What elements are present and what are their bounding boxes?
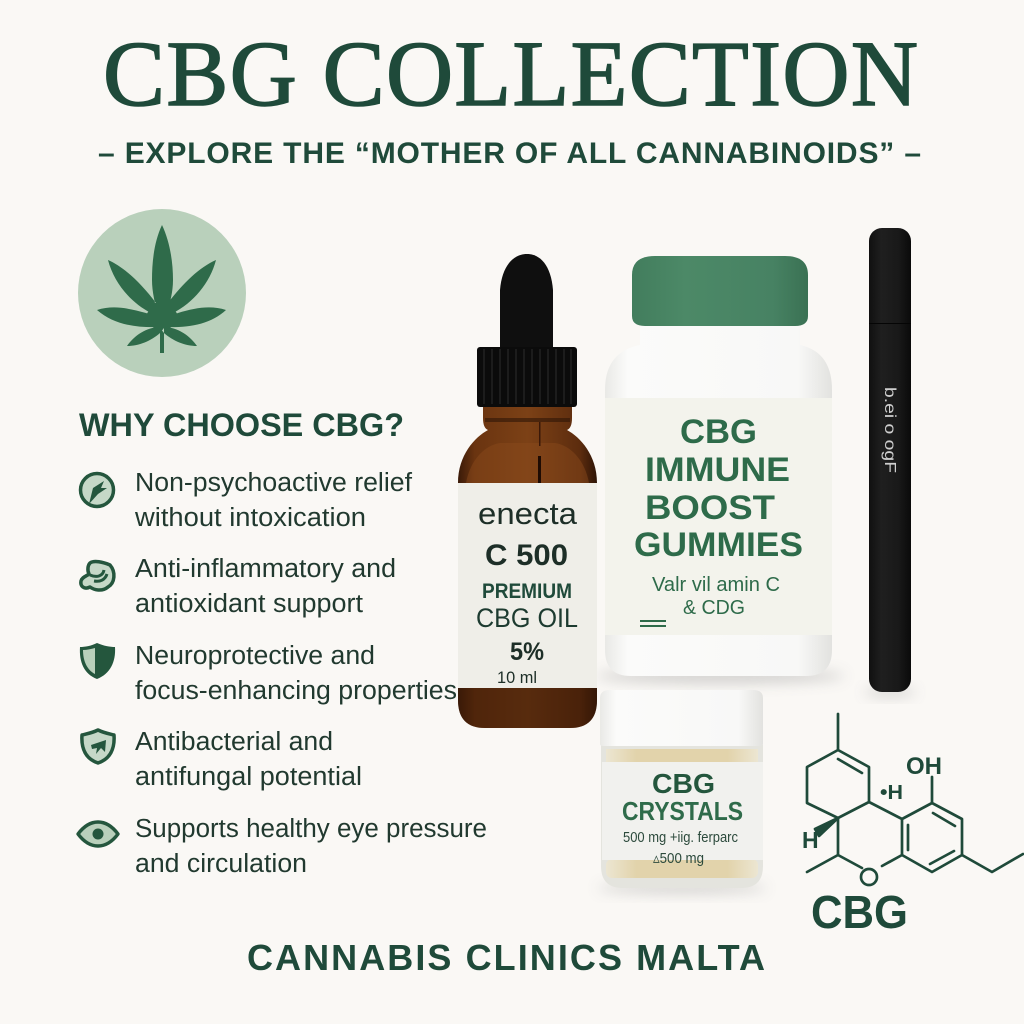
icon: sprout circle xyxy=(80,474,114,506)
benefit 5: and circulation xyxy=(135,850,307,878)
subtitle: – EXPLORE THE “MOTHER OF ALL CANNABINOIDS” – xyxy=(98,137,921,170)
oil label xyxy=(458,483,597,688)
product: gummies bottle: & CDG xyxy=(683,597,745,619)
benefit 1: Non-psychoactive relief xyxy=(135,469,413,497)
molecule labels: •H xyxy=(880,782,903,804)
benefit 5 xyxy=(78,815,487,878)
bottle body xyxy=(458,407,597,728)
benefit 3: Neuroprotective and xyxy=(135,642,375,670)
product: crystals jar: 500 mg +iig. ferparc xyxy=(623,830,738,846)
product: oil dropper bottle: PREMIUM xyxy=(482,580,572,603)
product: crystals jar xyxy=(597,690,767,893)
product: oil dropper bottle: enecta xyxy=(478,496,578,531)
product: oil dropper bottle: CBG OIL xyxy=(476,603,578,633)
product: oil dropper bottle xyxy=(458,254,597,728)
wedge bond xyxy=(815,818,838,836)
benefit 5: Supports healthy eye pressure xyxy=(135,815,487,843)
benefit 2: antioxidant support xyxy=(135,590,363,618)
dropper collar xyxy=(477,347,577,407)
product: gummies bottle: GUMMIES xyxy=(634,526,803,564)
product: oil dropper bottle: 10 ml xyxy=(497,668,537,687)
product: crystals jar: ▵500 mg xyxy=(653,850,704,867)
benefit 3: focus-enhancing properties xyxy=(135,677,457,705)
molecule labels xyxy=(802,753,942,853)
chemical structure xyxy=(802,714,1023,885)
product: gummies bottle xyxy=(595,256,845,683)
benefit 1 xyxy=(80,469,413,532)
bottle label xyxy=(605,398,832,635)
jar label xyxy=(602,762,763,860)
benefit 4 xyxy=(82,728,362,791)
product: crystals jar: CRYSTALS xyxy=(622,796,743,826)
dropper bulb xyxy=(500,254,553,347)
product: gummies bottle: Valr vil amin C xyxy=(652,574,780,596)
icon: eye xyxy=(78,822,118,846)
product: gummies bottle: BOOST xyxy=(645,489,775,527)
product: gummies bottle: IMMUNE xyxy=(645,451,790,489)
jar lid xyxy=(600,690,763,746)
product: oil dropper bottle: 5% xyxy=(510,638,544,666)
jar body xyxy=(601,745,763,888)
title: CBG COLLECTION xyxy=(103,23,918,126)
pen text: b.ei o ogF xyxy=(881,387,898,473)
heading: why choose cbg: WHY CHOOSE CBG? xyxy=(79,407,404,443)
icon: half shield xyxy=(80,643,115,679)
benefit 4: antifungal potential xyxy=(135,763,362,791)
icon: shield with bacteria xyxy=(82,730,114,763)
product: oil dropper bottle: C 500 xyxy=(485,539,568,572)
footer brand: CANNABIS CLINICS MALTA xyxy=(247,937,765,978)
product: black vape pen xyxy=(864,228,916,696)
molecule labels: H xyxy=(802,827,819,853)
benefit 2 xyxy=(81,555,396,618)
molecule name: CBG xyxy=(811,886,908,938)
benefit 4: Antibacterial and xyxy=(135,728,333,756)
benefit 2: Anti-inflammatory and xyxy=(135,555,396,583)
icon: cannabis leaf badge xyxy=(78,209,246,377)
molecule labels: OH xyxy=(906,753,942,780)
product: crystals jar: CBG xyxy=(652,768,715,799)
product: gummies bottle: CBG xyxy=(680,413,757,451)
benefit 3 xyxy=(80,642,457,705)
benefit 1: without intoxication xyxy=(134,504,366,532)
icon: gut xyxy=(81,562,114,590)
bottle cap xyxy=(632,256,808,326)
